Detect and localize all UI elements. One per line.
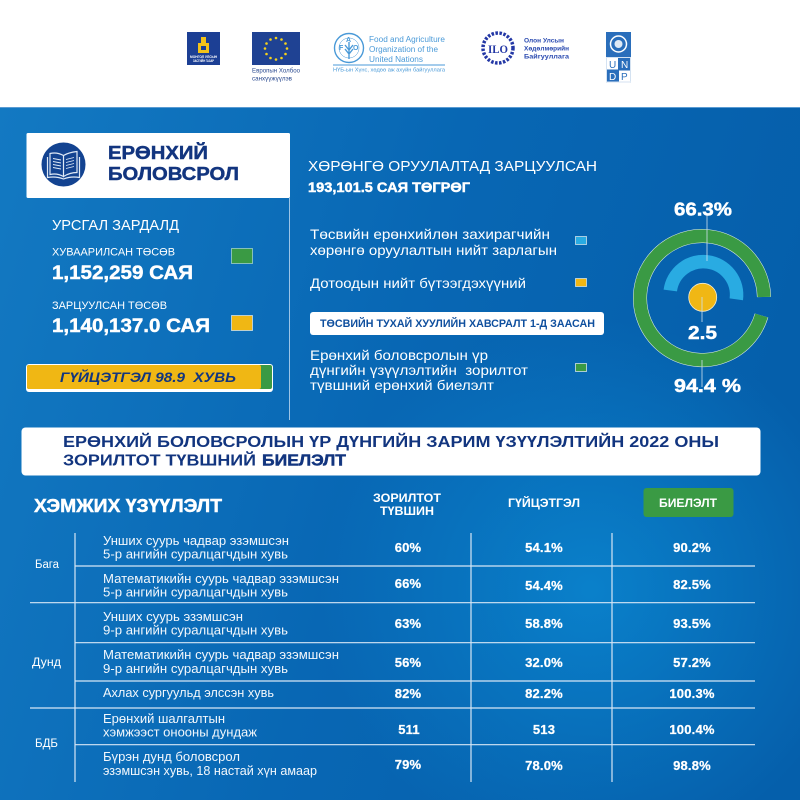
logo: UNDP: U bbox=[609, 60, 616, 71]
logo: Mongolia ministry: МОНГОЛ УЛСЫН bbox=[190, 55, 218, 59]
section title card: ЗОРИЛТОТ ТҮВШНИЙ bbox=[63, 450, 256, 470]
recurrent heading: УРСГАЛ ЗАРДАЛД bbox=[52, 218, 179, 234]
heading: capital investment: 193,101.5 САЯ ТӨГРӨГ bbox=[308, 180, 470, 195]
legend: capital investment share: Төсвийн ерөнхийлөн захирагчийн bbox=[310, 226, 550, 242]
section title card bbox=[22, 428, 760, 476]
row 1: 5-р ангийн суралцагчдын хувь bbox=[103, 548, 288, 562]
callout: budget law annex: ТӨСВИЙН ТУХАЙ ХУУЛИЙН ХАВСРАЛТ 1-Д ЗААСАН bbox=[320, 317, 595, 330]
allocated budget: 1,152,259 САЯ bbox=[52, 262, 193, 284]
row 3 bbox=[103, 610, 711, 638]
table header: ХЭМЖИХ ҮЗҮҮЛЭЛТ bbox=[34, 496, 222, 516]
logo: FAO bbox=[333, 34, 446, 74]
table grid bbox=[30, 533, 755, 782]
row 5: 82% bbox=[395, 686, 422, 701]
card heading: БОЛОВСРОЛ bbox=[108, 163, 239, 184]
row 7: 78.0% bbox=[525, 758, 563, 773]
row 4: 57.2% bbox=[673, 655, 711, 670]
table header: ЗОРИЛТОТ bbox=[373, 493, 441, 505]
logo: FAO: United Nations bbox=[369, 55, 423, 64]
row 4: 56% bbox=[395, 655, 422, 670]
row 1: 54.1% bbox=[525, 540, 563, 555]
callout: budget law annex bbox=[310, 312, 604, 335]
logo: FAO: F bbox=[339, 45, 344, 52]
panel: recurrent expenditure bbox=[52, 218, 252, 337]
row 2 bbox=[103, 572, 711, 600]
logo: European Union: Европын Холбоо bbox=[252, 66, 300, 74]
row 1: Унших суурь чадвар эзэмшсэн bbox=[103, 534, 289, 548]
row 3: 9-р ангийн суралцагчдын хувь bbox=[103, 624, 288, 638]
row 5: 100.3% bbox=[669, 686, 715, 701]
logo: FAO: Organization of the bbox=[369, 45, 439, 54]
row 7: Бүрэн дунд боловсрол bbox=[103, 750, 240, 764]
legend: capital investment share: хөрөнгө оруулалтын нийт зарлагын bbox=[310, 242, 557, 258]
row 2: 82.5% bbox=[673, 577, 711, 592]
row 6: Ерөнхий шалгалтын bbox=[103, 712, 225, 726]
row 5 bbox=[103, 686, 715, 701]
blue ring 66.3 percent bbox=[670, 262, 737, 299]
value 66.3 percent: 66.3% bbox=[674, 200, 732, 220]
yellow circle 2.5 bbox=[689, 283, 717, 311]
logo: FAO: O bbox=[353, 45, 359, 52]
row 2: 66% bbox=[395, 576, 422, 591]
row 6 bbox=[103, 712, 715, 740]
row 4 bbox=[103, 648, 711, 676]
logo: ILO bbox=[483, 33, 569, 63]
table header: ГҮЙЦЭТГЭЛ bbox=[508, 497, 580, 510]
heading: capital investment bbox=[308, 158, 597, 195]
legend: outcome target achievement: дүнгийн үзүүлэлтийн зорилтот bbox=[310, 362, 529, 378]
row 3: Унших суурь эзэмшсэн bbox=[103, 610, 243, 624]
panel: general education title card bbox=[26, 133, 290, 198]
row 7: 79% bbox=[395, 757, 422, 772]
row 2: 5-р ангийн суралцагчдын хувь bbox=[103, 586, 288, 600]
level labels: Дунд bbox=[32, 657, 61, 669]
logo: European Union: санхүүжүүлэв bbox=[252, 76, 293, 82]
logo: UNDP: P bbox=[621, 72, 628, 83]
row 5: 82.2% bbox=[525, 686, 563, 701]
row 3: 93.5% bbox=[673, 616, 711, 631]
progress bar: execution 98.9 percent: ГҮЙЦЭТГЭЛ 98.9 ХУВЬ bbox=[60, 368, 236, 385]
row 4: Математикийн суурь чадвар эзэмшсэн bbox=[103, 648, 339, 662]
logo: ILO: Олон Улсын bbox=[524, 38, 564, 44]
row 6: 511 bbox=[398, 722, 420, 737]
row 6: хэмжээст онооны дундаж bbox=[103, 726, 258, 740]
logo: European Union bbox=[252, 32, 300, 82]
logo: ILO: ILO bbox=[488, 42, 508, 56]
table header: ТҮВШИН bbox=[380, 506, 434, 518]
value 94.4 percent: 94.4 % bbox=[674, 376, 741, 396]
legend: outcome target achievement bbox=[310, 347, 586, 393]
logo: FAO: Food and Agriculture bbox=[369, 35, 446, 44]
level labels: БДБ bbox=[35, 738, 58, 750]
allocated budget: ХУВААРИЛСАН ТӨСӨВ bbox=[52, 247, 175, 259]
progress bar: execution 98.9 percent bbox=[26, 364, 273, 392]
row 1: 60% bbox=[395, 540, 422, 555]
row 6: 100.4% bbox=[669, 722, 715, 737]
legend: outcome target achievement: түвшний ерөнхий биелэлт bbox=[310, 377, 495, 393]
legend swatch: spent bbox=[232, 316, 252, 330]
legend: outcome target achievement: Ерөнхий боловсролын үр bbox=[310, 347, 488, 363]
row 1 bbox=[103, 534, 711, 562]
logo: ILO: Байгууллага bbox=[524, 52, 569, 60]
row 7: эзэмшсэн хувь, 18 настай хүн амаар bbox=[103, 764, 317, 778]
card heading bbox=[108, 142, 239, 184]
legend: GDP: Дотоодын нийт бүтээгдэхүүний bbox=[310, 275, 526, 291]
logo: FAO: НҮБ-ын Хүнс, хөдөө аж ахуйн байгууллага bbox=[333, 66, 446, 74]
section title card: БИЕЛЭЛТ bbox=[262, 452, 346, 470]
row 6: 513 bbox=[533, 722, 555, 737]
divider line between left and right panels bbox=[289, 198, 290, 420]
spent budget bbox=[52, 300, 210, 337]
allocated budget bbox=[52, 247, 193, 284]
level labels bbox=[32, 559, 61, 750]
logo: UNDP bbox=[606, 32, 631, 83]
row 3: 63% bbox=[395, 616, 422, 631]
spent budget: ЗАРЦУУЛСАН ТӨСӨВ bbox=[52, 300, 167, 312]
logo: UNDP: N bbox=[621, 60, 628, 71]
row 4: 9-р ангийн суралцагчдын хувь bbox=[103, 662, 288, 676]
legend: capital investment share bbox=[310, 226, 586, 258]
radial chart bbox=[640, 200, 764, 396]
logo: ILO: Хөдөлмөрийн bbox=[524, 44, 569, 52]
row 7 bbox=[103, 750, 711, 778]
table bbox=[30, 488, 755, 782]
row 2: Математикийн суурь чадвар эзэмшсэн bbox=[103, 572, 339, 586]
table header: БИЕЛЭЛТ bbox=[659, 498, 717, 510]
logo: Mongolia ministry bbox=[187, 32, 220, 65]
logo: Mongolia ministry: ЗАСГИЙН ГАЗАР bbox=[193, 59, 215, 63]
value 2.5: 2.5 bbox=[688, 323, 717, 343]
leader lines bbox=[702, 215, 707, 387]
green ring 94.4 percent bbox=[640, 236, 764, 360]
row 4: 32.0% bbox=[525, 655, 563, 670]
spent budget: 1,140,137.0 САЯ bbox=[52, 315, 210, 337]
row 1: 90.2% bbox=[673, 540, 711, 555]
header band bbox=[0, 0, 800, 107]
row 7: 98.8% bbox=[673, 758, 711, 773]
row 2: 54.4% bbox=[525, 578, 563, 593]
icon: open book bbox=[42, 142, 86, 186]
logo: FAO: A bbox=[346, 37, 351, 44]
section title card: ЕРӨНХИЙ БОЛОВСРОЛЫН ҮР ДҮНГИЙН ЗАРИМ ҮЗҮҮЛЭЛТИЙН 2022 ОНЫ bbox=[63, 432, 719, 451]
row 3: 58.8% bbox=[525, 616, 563, 631]
heading: capital investment: ХӨРӨНГӨ ОРУУЛАЛТАД ЗАРЦУУЛСАН bbox=[308, 158, 597, 175]
level labels: Бага bbox=[35, 559, 60, 571]
row 5: Ахлах сургуульд элссэн хувь bbox=[103, 686, 274, 700]
logo: UNDP: D bbox=[609, 72, 616, 83]
table header bbox=[34, 488, 734, 518]
legend swatch: allocated bbox=[232, 248, 252, 264]
card heading: ЕРӨНХИЙ bbox=[108, 142, 208, 163]
